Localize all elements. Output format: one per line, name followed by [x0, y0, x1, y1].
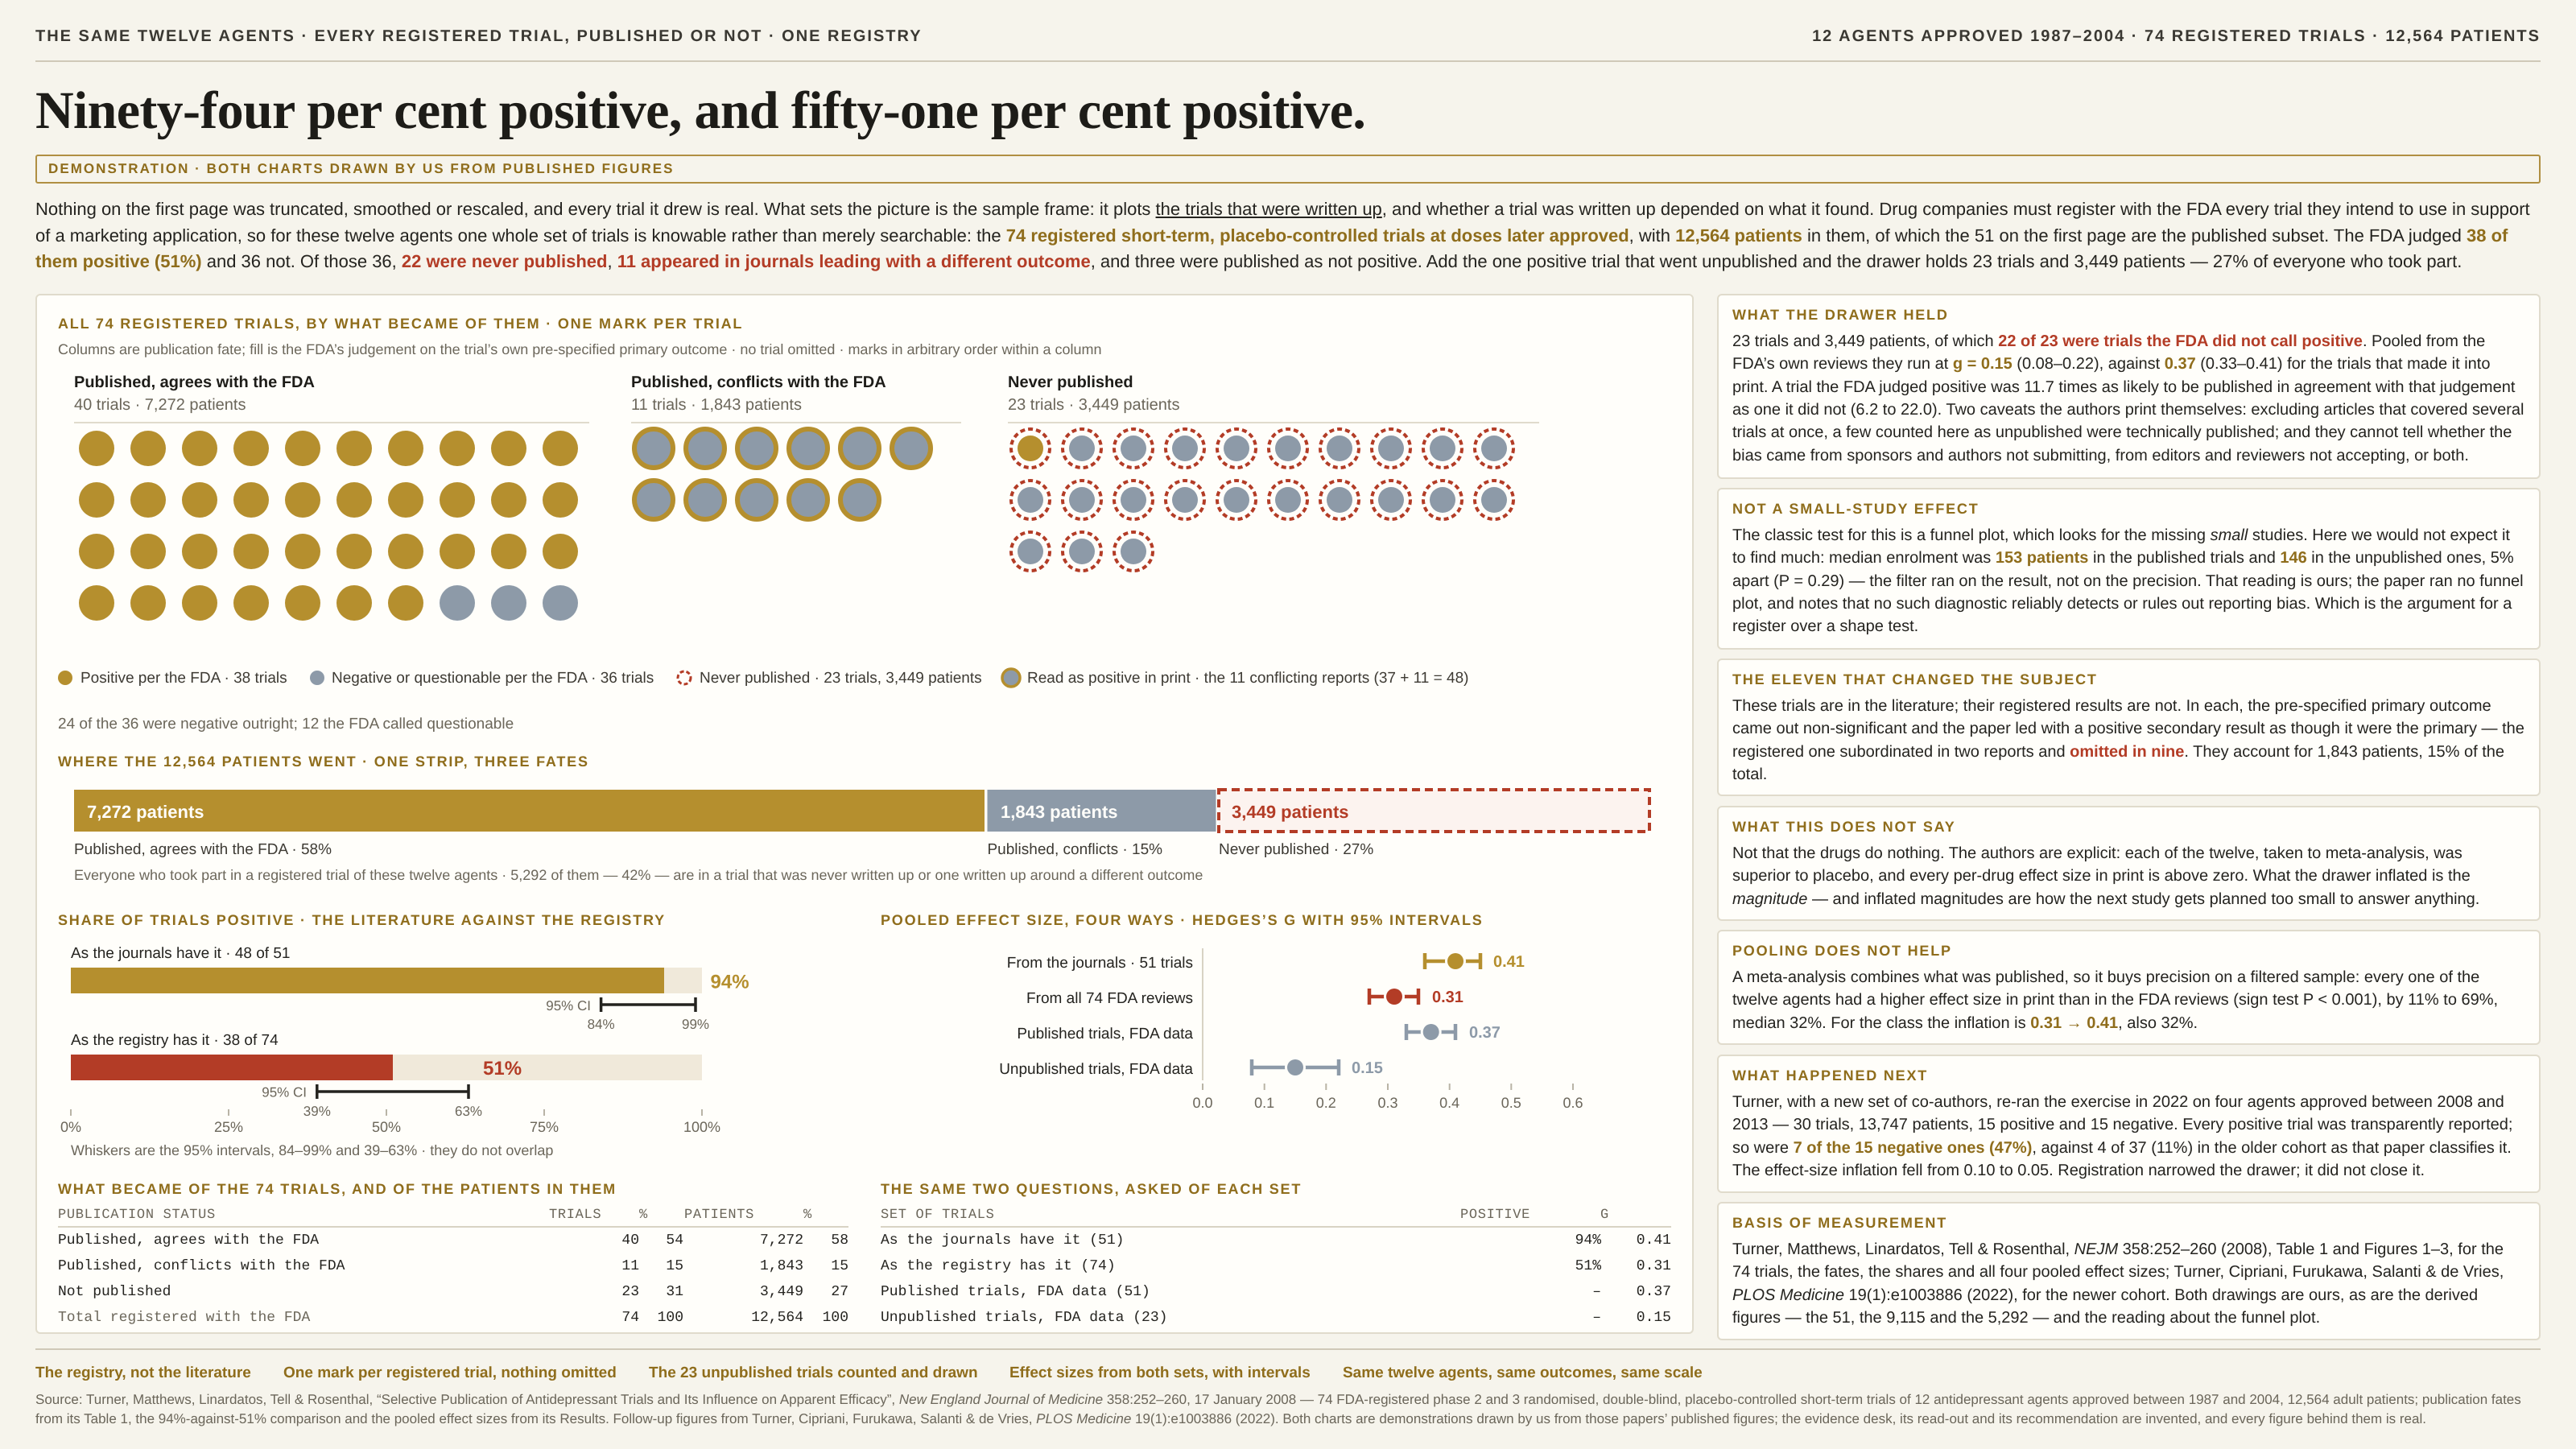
table: fate of trials and patients: Published, conflicts with the FDA	[58, 1258, 345, 1274]
table: fate of trials and patients: 12,564	[751, 1310, 803, 1326]
table: two questions: 0.37	[1637, 1284, 1671, 1300]
intro paragraph: Nothing on the first page was truncated, smoothed or rescaled, and every trial it drew is real. What sets the picture is the sample frame: it plots the trials that were written up, and whether a trial was written up depended on what it found. Drug companies must register with the FDA every trial they intend to use in support	[35, 199, 2530, 219]
table: two questions	[881, 1208, 1671, 1326]
kicker: left: THE SAME TWELVE AGENTS · EVERY REGISTERED TRIAL, PUBLISHED OR NOT · ONE REGISTRY	[35, 27, 923, 45]
chart: forest plot: 0.1	[1254, 1095, 1274, 1111]
table: two questions: –	[1592, 1284, 1601, 1300]
table: fate of trials and patients: 3,449	[760, 1284, 803, 1300]
panel: what this does not say: superior to placebo, and every per-drug effect size in print is above zero. What the drawer inflated is the	[1732, 867, 2471, 885]
column: published, agrees with the FDA: Published, agrees with the FDA	[74, 374, 315, 391]
chart: forest plot: 0.3	[1377, 1095, 1398, 1111]
chart: forest plot: 0.0	[1192, 1095, 1213, 1111]
panel: what happened next: Turner, with a new set of co-authors, re-ran the exercise in 2022 on four agents approved between 2008 and	[1732, 1093, 2504, 1111]
footer: method notes: The 23 unpublished trials counted and drawn	[649, 1364, 978, 1381]
panel: the eleven that changed the subject: registered one subordinated in two reports and omitted in nine. They account for 1,843 patients, 15% of the	[1732, 743, 2504, 761]
panel: pooling does not help: POOLING DOES NOT HELP	[1732, 943, 1952, 959]
table: fate of trials and patients: 100	[658, 1310, 683, 1326]
strip: patients by fate: Published, agrees with the FDA · 58%	[74, 841, 332, 858]
strip: patients by fate: Published, conflicts · 15%	[987, 841, 1162, 858]
strip: patients by fate: 3,449 patients	[1232, 802, 1349, 822]
chart: share positive bars: 100%	[683, 1119, 720, 1135]
chart: forest plot: Published trials, FDA data	[1017, 1026, 1193, 1042]
chart: share positive bars: 99%	[682, 1017, 709, 1032]
strip: patients by fate: Never published · 27%	[1219, 841, 1373, 858]
footer: source	[35, 1392, 2521, 1426]
panel: not a small-study effect: register over a shape test.	[1732, 617, 1918, 635]
panel: the eleven that changed the subject: THE ELEVEN THAT CHANGED THE SUBJECT	[1732, 671, 2098, 687]
heading: share positive: SHARE OF TRIALS POSITIVE · THE LITERATURE AGAINST THE REGISTRY	[58, 912, 666, 928]
table: fate of trials and patients: Total registered with the FDA	[58, 1310, 310, 1326]
column: published, agrees with the FDA: 40 trials · 7,272 patients	[74, 396, 246, 414]
table: fate of trials and patients: 15	[831, 1258, 848, 1274]
chart: share positive bars: 51%	[483, 1058, 522, 1080]
panel: what this does not say: Not that the drugs do nothing. The authors are explicit: each of the twelve, taken to meta-analysis, was	[1732, 844, 2462, 862]
panel: basis of measurement: 74 trials, the fates, the shares and all four pooled effect sizes; Turner, Cipriani, Furukawa, Salanti & de Vries,	[1732, 1263, 2504, 1281]
chart: share positive bars: As the registry has it · 38 of 74	[71, 1032, 279, 1049]
table: fate of trials and patients: PATIENTS	[684, 1208, 754, 1223]
chart: forest plot: 0.2	[1316, 1095, 1336, 1111]
chart: share positive bars: 63%	[455, 1104, 482, 1119]
column: never published: Never published	[1008, 374, 1133, 391]
panel: what happened next: WHAT HAPPENED NEXT	[1732, 1067, 1928, 1084]
chart: forest plot: From all 74 FDA reviews	[1026, 990, 1193, 1007]
panel: what the drawer held: 23 trials and 3,449 patients, of which 22 of 23 were trials the FDA did not call positive. Pooled from the	[1732, 332, 2485, 350]
chart: forest plot: 0.5	[1501, 1095, 1521, 1111]
heading: patients strip: WHERE THE 12,564 PATIENTS WENT · ONE STRIP, THREE FATES	[58, 753, 589, 770]
strip: patients by fate: 1,843 patients	[1001, 802, 1118, 822]
chart: share positive bars: As the journals have it · 48 of 51	[71, 945, 290, 962]
legend: Read as positive in print · the 11 conflicting reports (37 + 11 = 48)	[1027, 670, 1468, 687]
table: two questions: 51%	[1575, 1258, 1601, 1274]
chart: forest plot	[999, 948, 1583, 1111]
table: two questions: As the journals have it (51)	[881, 1232, 1124, 1249]
footer: method notes	[35, 1364, 1703, 1381]
chart: forest plot: 0.4	[1439, 1095, 1459, 1111]
table: fate of trials and patients: Published, agrees with the FDA	[58, 1232, 319, 1249]
table: fate of trials and patients: 23	[621, 1284, 639, 1300]
title: Ninety-four per cent positive, and fifty-one per cent positive.	[35, 81, 1365, 140]
column: published, conflicts with the FDA: 11 trials · 1,843 patients	[631, 396, 802, 414]
column: published, agrees with the FDA	[74, 374, 589, 621]
panel: basis of measurement: PLOS Medicine 19(1):e1003886 (2022), for the newer cohort. Both drawings are ours, as are the derived	[1732, 1286, 2478, 1304]
chart: share positive bars	[60, 945, 749, 1158]
table: two questions: G	[1600, 1208, 1609, 1223]
panel: not a small-study effect: NOT A SMALL-STUDY EFFECT	[1732, 501, 1979, 517]
panel: basis of measurement: BASIS OF MEASUREMENT	[1732, 1215, 1947, 1231]
chart: share positive bars: 94%	[710, 971, 749, 993]
column: published, conflicts with the FDA	[631, 374, 961, 519]
table: fate of trials and patients: 40	[621, 1232, 639, 1249]
chart: forest plot: 0.15	[1352, 1059, 1383, 1077]
panel: not a small-study effect	[1717, 488, 2541, 650]
panel: pooling does not help: twelve agents had a higher effect size in print than in the FDA reviews (sign test P < 0.001), by 11% to 69%,	[1732, 991, 2498, 1009]
intro paragraph: of a marketing application, so for these twelve agents one whole set of trials is knowable rather than merely searchable: the 74 registered short-term, placebo-controlled trials at doses later approved, with 12,564 patients in them, of which the 51 on the first page are the published subset. The FDA judged 38 of	[35, 225, 2508, 245]
panel: what the drawer held: print. A trial the FDA judged positive was 11.7 times as likely to be published in agreement with that judgement	[1732, 378, 2515, 396]
heading: fate table: WHAT BECAME OF THE 74 TRIALS, AND OF THE PATIENTS IN THEM	[58, 1181, 617, 1197]
table: fate of trials and patients: 31	[666, 1284, 683, 1300]
panel: not a small-study effect: to find much: median enrolment was 153 patients in the published trials and 146 in the unpublished ones, 5%	[1732, 549, 2514, 567]
legend note: 24 of the 36 were negative outright; 12 the FDA called questionable	[58, 716, 514, 733]
table: fate of trials and patients: PUBLICATION STATUS	[58, 1208, 216, 1223]
chart: forest plot: From the journals · 51 trials	[1007, 955, 1193, 972]
table: fate of trials and patients: 27	[831, 1284, 848, 1300]
table: two questions: Published trials, FDA data (51)	[881, 1284, 1150, 1300]
table: fate of trials and patients: Not published	[58, 1284, 171, 1300]
panel: charts and tables	[35, 294, 1694, 1334]
panel: the eleven that changed the subject: total.	[1732, 766, 1767, 783]
panel: what happened next: The effect-size inflation fell from 0.10 to 0.05. Registration narrowed the drawer; it did not close it.	[1732, 1162, 2425, 1179]
panel: pooling does not help: median 32%. For the class the inflation is 0.31 → 0.41, also 32%.	[1732, 1014, 2198, 1032]
table: two questions: 0.15	[1637, 1310, 1671, 1326]
intro paragraph: them positive (51%) and 36 not. Of those 36, 22 were never published, 11 appeared in journals leading with a different outcome, and three were published as not positive. Add the one positive trial that went unpublished and the drawer holds 23 trials and 3,449 patients — 27% of everyone who took part.	[35, 251, 2462, 271]
legend: Positive per the FDA · 38 trials	[80, 670, 287, 687]
panel: not a small-study effect: plot, and notes that no such diagnostic reliably detects or rules out reporting bias. Which is the argument for a	[1732, 595, 2512, 613]
chart: forest plot: Unpublished trials, FDA data	[999, 1061, 1193, 1078]
table: fate of trials and patients: 11	[621, 1258, 639, 1274]
panel: what the drawer held: WHAT THE DRAWER HELD	[1732, 307, 1949, 323]
column: never published	[1008, 374, 1539, 571]
chart: forest plot: 0.37	[1469, 1024, 1501, 1042]
chart: share positive bars: Whiskers are the 95% intervals, 84–99% and 39–63% · they do not overlap	[71, 1142, 553, 1158]
table: fate of trials and patients: TRIALS	[549, 1208, 601, 1223]
table: two questions: SET OF TRIALS	[881, 1208, 994, 1223]
strip: patients by fate: 7,272 patients	[87, 802, 204, 822]
chart: share positive bars: 0%	[60, 1119, 81, 1135]
heading: all 74 trials: ALL 74 REGISTERED TRIALS, BY WHAT BECAME OF THEM · ONE MARK PER TRIAL	[58, 316, 743, 332]
table: fate of trials and patients: 54	[666, 1232, 683, 1249]
table: two questions: –	[1592, 1310, 1601, 1326]
heading: all 74 trials: Columns are publication fate; fill is the FDA’s judgement on the trial’s own pre-specified primary outcome · no trial omitted · marks in arbitrary order within a column	[58, 341, 1102, 357]
demonstration banner	[35, 155, 2541, 184]
table: two questions: 94%	[1575, 1232, 1601, 1249]
panel: the eleven that changed the subject	[1717, 658, 2541, 796]
column: never published: 23 trials · 3,449 patients	[1008, 396, 1179, 414]
footer: source: from its Table 1, the 94%-against-51% comparison and the pooled effect sizes from its Results. Follow-up figures from Turner, Cipriani, Furukawa, Salanti & de Vries, PLOS Medicine 19(1):e1003886 (2022). Both charts are demonstrations drawn by us from those papers’ published figures; the evidence desk, its read-out and its recommendation are invented, and every figure behind them is real.	[35, 1411, 2426, 1426]
table: fate of trials and patients: %	[803, 1208, 812, 1223]
footer: method notes: One mark per registered trial, nothing omitted	[283, 1364, 617, 1381]
panel: not a small-study effect: apart (P = 0.29) — the filter ran on the result, not on the precision. That reading is ours; the paper ran no funnel	[1732, 572, 2524, 590]
table: fate of trials and patients	[58, 1208, 848, 1326]
chart: share positive bars: 50%	[372, 1119, 401, 1135]
strip: patients by fate: Everyone who took part in a registered trial of these twelve agents · 5,292 of them — 42% — are in a trial that was never written up or one written up around a different outcome	[74, 867, 1203, 883]
kicker: right: 12 AGENTS APPROVED 1987–2004 · 74 REGISTERED TRIALS · 12,564 PATIENTS	[1812, 27, 2541, 45]
panel: what this does not say: magnitude — and inflated magnitudes are how the next study gets planned too small to answer anything.	[1732, 890, 2479, 908]
table: fate of trials and patients: 100	[823, 1310, 848, 1326]
table: two questions: As the registry has it (74)	[881, 1258, 1116, 1274]
legend	[58, 669, 1468, 687]
table: fate of trials and patients: 58	[831, 1232, 848, 1249]
panel: pooling does not help: A meta-analysis combines what was published, so it buys precision on a filtered sample: every one of the	[1732, 968, 2479, 986]
table: fate of trials and patients: %	[639, 1208, 648, 1223]
panel: the eleven that changed the subject: These trials are in the literature; their registered results are not. In each, the pre-specified primary outcome	[1732, 697, 2491, 715]
table: fate of trials and patients: 15	[666, 1258, 683, 1274]
chart: share positive bars: 39%	[303, 1104, 331, 1119]
panel: pooling does not help	[1717, 930, 2541, 1045]
table: two questions: 0.31	[1637, 1258, 1671, 1274]
panel: basis of measurement: figures — the 51, the 9,115 and the 5,292 — and the reading about the funnel plot.	[1732, 1309, 2320, 1327]
chart: share positive bars: 95% CI	[546, 998, 591, 1013]
table: fate of trials and patients: 74	[621, 1310, 639, 1326]
strip: patients by fate	[74, 790, 1649, 883]
panel: what this does not say	[1717, 806, 2541, 921]
footer: source: Source: Turner, Matthews, Linardatos, Tell & Rosenthal, “Selective Publication of Antidepressant Trials and Its Influence on Apparent Efficacy”, New England Journal of Medicine 358:252–260, 17 January 2008 — 74 FDA-registered phase 2 and 3 randomised, double-blind, placebo-controlled short-term trials of 12 antidepressant agents approved between 1987 and 2004, 12,564 adult patients; publication fates	[35, 1392, 2521, 1407]
demonstration banner: DEMONSTRATION · BOTH CHARTS DRAWN BY US FROM PUBLISHED FIGURES	[48, 161, 675, 176]
legend: Negative or questionable per the FDA · 36 trials	[332, 670, 654, 687]
panel: what the drawer held	[1717, 294, 2541, 479]
heading: two questions table: THE SAME TWO QUESTIONS, ASKED OF EACH SET	[881, 1181, 1302, 1197]
footer: method notes: The registry, not the literature	[35, 1364, 251, 1381]
table: fate of trials and patients: 1,843	[760, 1258, 803, 1274]
panel: not a small-study effect: The classic test for this is a funnel plot, which looks for the missing small studies. Here we would not expect it	[1732, 526, 2510, 544]
chart: share positive bars: 95% CI	[262, 1085, 307, 1100]
panel: basis of measurement: Turner, Matthews, Linardatos, Tell & Rosenthal, NEJM 358:252–260 (2008), Table 1 and Figures 1–3, for the	[1732, 1241, 2504, 1258]
panel: what the drawer held: bias came from sponsors and authors not submitting, from editors and reviewers not accepting, or both.	[1732, 447, 2469, 464]
panel: what the drawer held: trials at once, a few counted here as unpublished were technically published; and they cannot tell whether the	[1732, 423, 2512, 441]
table: two questions: POSITIVE	[1460, 1208, 1530, 1223]
table: two questions: 0.41	[1637, 1232, 1671, 1249]
panel: what happened next	[1717, 1055, 2541, 1193]
heading: pooled effect: POOLED EFFECT SIZE, FOUR WAYS · HEDGES’S G WITH 95% INTERVALS	[881, 912, 1484, 928]
table: two questions: Unpublished trials, FDA data (23)	[881, 1310, 1167, 1326]
panel: what this does not say: WHAT THIS DOES NOT SAY	[1732, 819, 1956, 835]
panel: basis of measurement	[1717, 1202, 2541, 1340]
panel: what the drawer held: as one it did not (6.2 to 22.0). Two caveats the authors print themselves: excluding articles that covered several	[1732, 401, 2524, 419]
table: fate of trials and patients: 7,272	[760, 1232, 803, 1249]
chart: share positive bars: 25%	[214, 1119, 243, 1135]
column: published, conflicts with the FDA: Published, conflicts with the FDA	[631, 374, 886, 391]
heading: all 74 trials	[58, 316, 1102, 357]
chart: share positive bars: 75%	[530, 1119, 559, 1135]
footer: method notes: Same twelve agents, same outcomes, same scale	[1343, 1364, 1703, 1381]
chart: forest plot: 0.6	[1563, 1095, 1583, 1111]
chart: forest plot: 0.41	[1493, 953, 1525, 971]
footer: method notes: Effect sizes from both sets, with intervals	[1009, 1364, 1311, 1381]
legend: Never published · 23 trials, 3,449 patients	[700, 670, 982, 687]
chart: share positive bars: 84%	[588, 1017, 615, 1032]
panel: what the drawer held: FDA’s own reviews they run at g = 0.15 (0.08–0.22), against 0.37 (0.33–0.41) for the trials that made it into	[1732, 355, 2490, 373]
panel: what happened next: 2013 — 30 trials, 13,747 patients, 15 positive and 15 negative. Every positive trial was transparently reported;	[1732, 1116, 2512, 1133]
intro paragraph	[35, 199, 2530, 271]
panel: the eleven that changed the subject: came out non-significant and the paper led with a positive secondary result as though it were the primary — the	[1732, 720, 2524, 737]
chart: forest plot: 0.31	[1432, 989, 1463, 1006]
panel: what happened next: so were 7 of the 15 negative ones (47%), against 4 of 37 (11%) in the older cohort as that paper classifies it.	[1732, 1139, 2512, 1157]
